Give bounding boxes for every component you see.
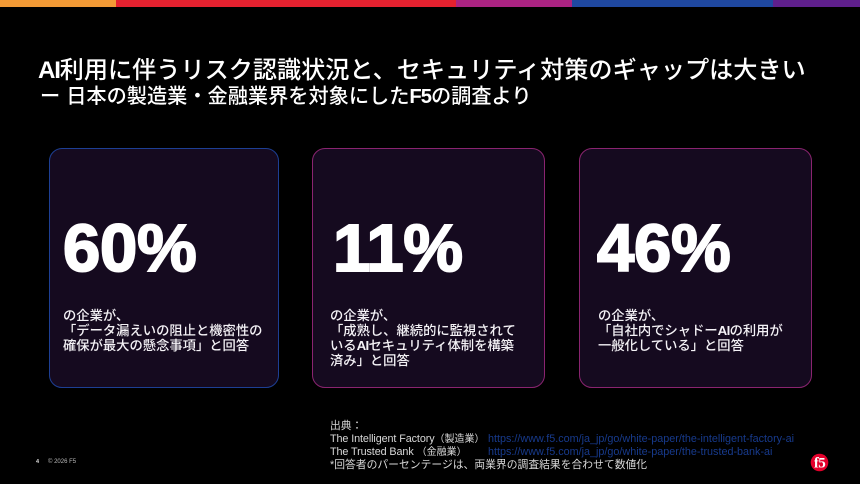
sources: https://www.f5.com/ja_jp/go/white-paper/the-trusted-bank-ai bbox=[488, 446, 772, 458]
subtitle: ー日本の製造業・金融業界を対象にしたF5の調査より bbox=[40, 86, 532, 108]
text: 60% description: 確保が最大の懸念事項」と回答 bbox=[63, 338, 249, 353]
text: 11% description: 済み」と回答 bbox=[330, 353, 410, 368]
text: 11% description: いるAIセキュリティ体制を構築 bbox=[330, 338, 514, 353]
text: 60% description bbox=[63, 308, 262, 353]
panel: 60% bbox=[48, 148, 279, 388]
text: 11% description: 「成熟し、継続的に監視されて bbox=[330, 323, 516, 338]
text: 46% description: 「自社内でシャドーAIの利用が bbox=[598, 323, 783, 338]
title: AI利用に伴うリスク認識状況と、セキュリティ対策のギャップは大きい bbox=[38, 57, 806, 84]
text: 46% description bbox=[598, 308, 783, 353]
icon: F5 logo bbox=[810, 454, 828, 472]
text: 11% description: の企業が、 bbox=[330, 308, 396, 322]
sources: https://www.f5.com/ja_jp/go/white-paper/the-intelligent-factory-ai bbox=[488, 432, 794, 444]
icon: F5 logo: f5 bbox=[814, 456, 825, 472]
text: 11% description bbox=[330, 308, 516, 368]
text: 46% description: 一般化している」と回答 bbox=[598, 338, 744, 353]
panel: 46% bbox=[578, 148, 812, 388]
copyright: © 2026 F5 bbox=[48, 459, 76, 465]
sources: The Trusted Bank （金融業） bbox=[330, 446, 467, 458]
sources bbox=[330, 420, 794, 470]
text: 60% description: 「データ漏えいの阻止と機密性の bbox=[63, 323, 262, 338]
stat: 46%: 46% bbox=[597, 211, 730, 286]
text: 46% description: の企業が、 bbox=[598, 308, 664, 322]
sources: 出典： bbox=[330, 420, 362, 432]
sources: The Intelligent Factory（製造業） bbox=[330, 432, 485, 444]
text: 60% description: の企業が、 bbox=[63, 308, 129, 322]
stat: 11%: 11% bbox=[333, 211, 463, 286]
page number: 4 bbox=[36, 459, 39, 465]
panel: 11% bbox=[312, 148, 544, 388]
sources: *回答者のパーセンテージは、両業界の調査結果を合わせて数値化 bbox=[330, 458, 647, 470]
stat: 60%: 60% bbox=[63, 211, 196, 286]
top colour bar bbox=[0, 0, 860, 7]
